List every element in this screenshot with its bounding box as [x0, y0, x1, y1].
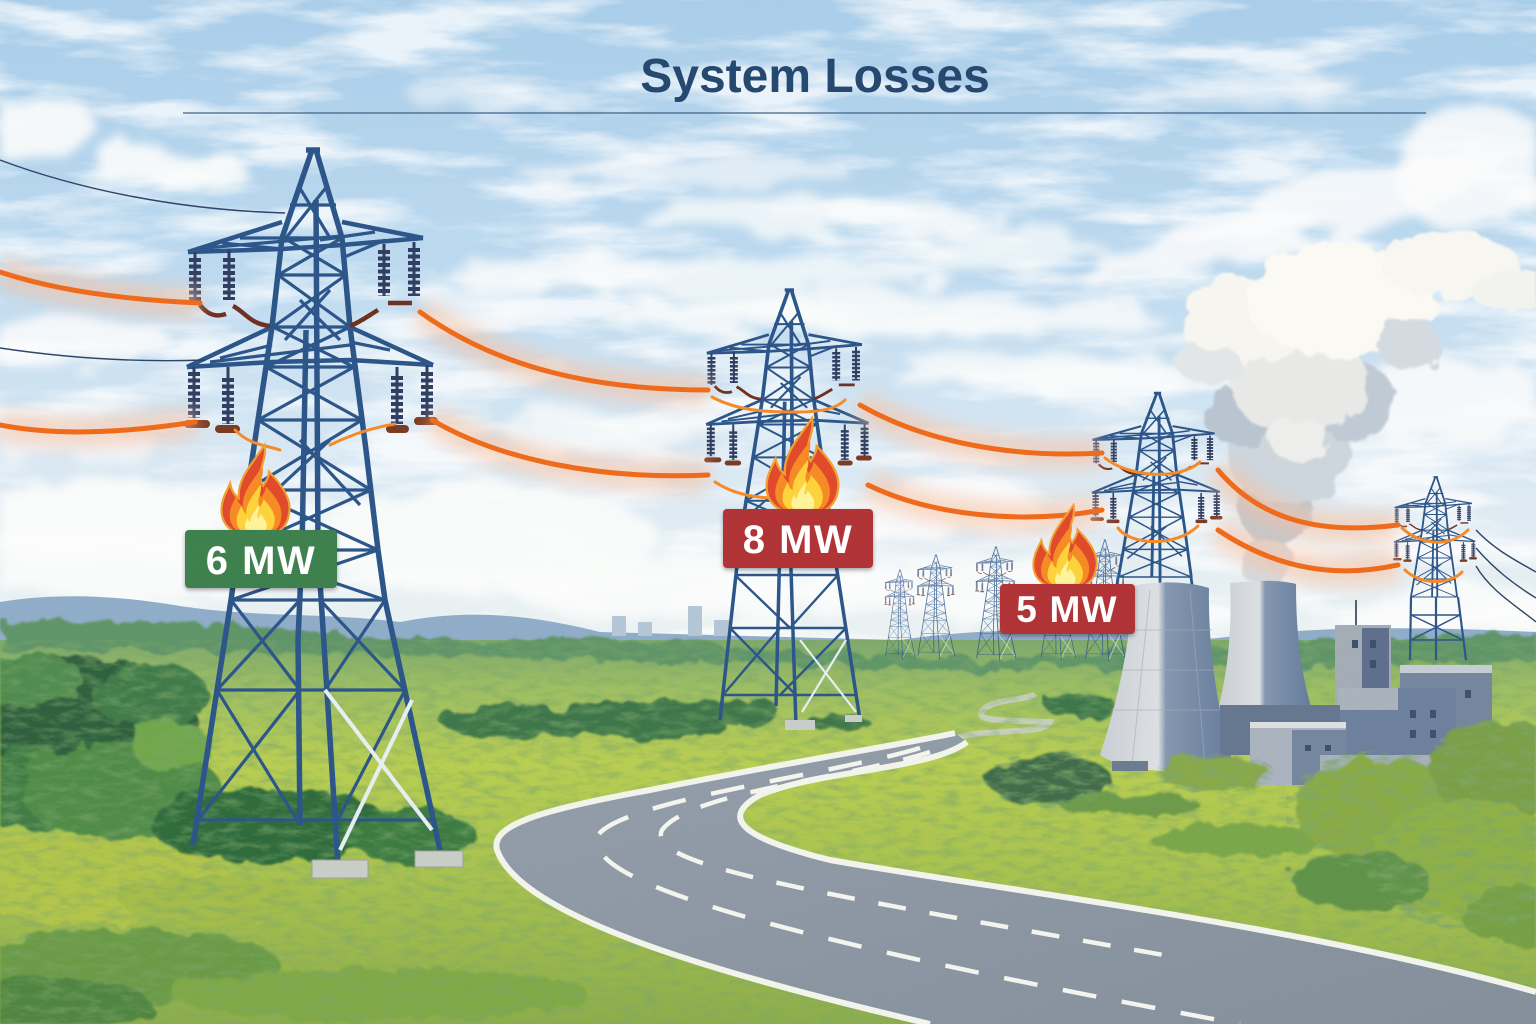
concrete footing: [312, 851, 463, 878]
wispy sky texture: [0, 0, 1536, 660]
title rule: [183, 112, 1426, 114]
tower 4: [1394, 477, 1476, 660]
power plant buildings: [1220, 600, 1492, 785]
title: System Losses: [640, 50, 990, 103]
badge: 6 MW: [185, 530, 337, 588]
steam plume: [1178, 233, 1536, 588]
tower 3: [1092, 393, 1220, 592]
distant city: [612, 606, 730, 636]
field texture: [0, 640, 1536, 1024]
left trees and bushes: [0, 654, 590, 1024]
thin conductor wires: [0, 160, 1536, 622]
flame 1: [221, 445, 290, 534]
first cooling tower: [1100, 582, 1232, 771]
badge: 5 MW: 5 MW: [1016, 589, 1118, 630]
wire glow: [0, 272, 1398, 571]
tower 2: [706, 290, 869, 730]
far tree line: [0, 621, 1536, 669]
tower 1: [187, 150, 463, 878]
second cooling tower: [1218, 581, 1312, 710]
foreground bushes right: [988, 720, 1536, 945]
road: [496, 733, 1536, 1024]
middle hedge: [440, 691, 1115, 738]
ground field: [0, 640, 1536, 1024]
glowing power lines: [0, 272, 1468, 582]
badge: 5 MW: [1000, 584, 1135, 634]
badge: 8 MW: [723, 509, 873, 568]
distant road: [955, 694, 1050, 738]
flame 2: [767, 418, 838, 512]
badge: 6 MW: 6 MW: [206, 539, 316, 583]
bush texture: [986, 720, 1536, 930]
sky background: [0, 0, 1536, 660]
flame 3: [1033, 505, 1097, 587]
distant hills: [0, 596, 1536, 680]
distant towers: [885, 540, 1125, 662]
badge: 8 MW: 8 MW: [743, 518, 853, 562]
lane markings lower: [597, 748, 1240, 1024]
clouds: [0, 76, 1536, 635]
lane markings upper: [661, 752, 1180, 958]
